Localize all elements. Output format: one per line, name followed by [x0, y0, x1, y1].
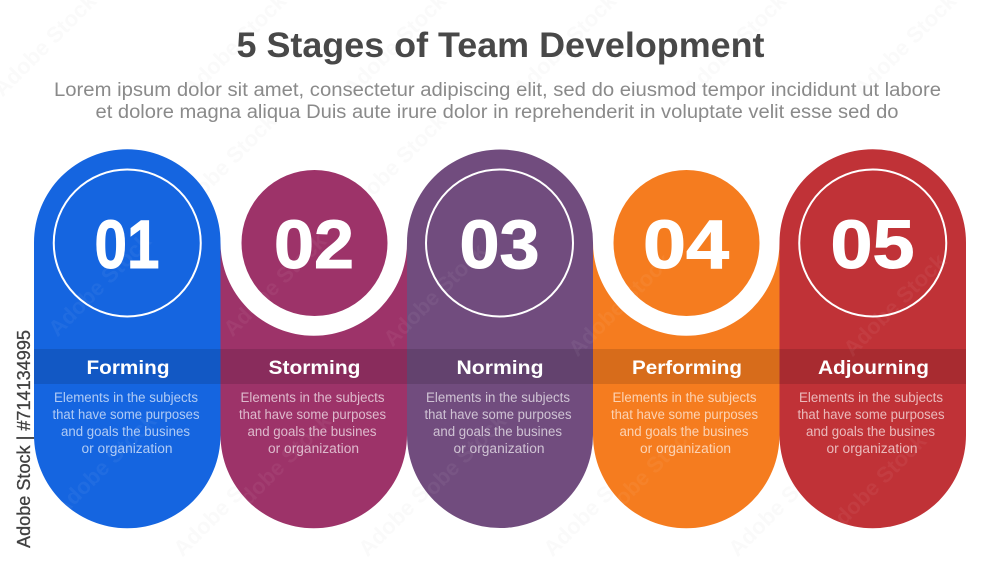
description 1: or organization: [82, 441, 172, 456]
label band 3: [407, 349, 593, 384]
heading Norming: Norming: [456, 357, 544, 379]
stock image side label: Adobe Stock | #714134995: [14, 330, 34, 548]
description 3: that have some purposes: [424, 407, 572, 422]
label band 1: [34, 349, 220, 384]
description 2: and goals the busines: [248, 424, 377, 439]
description 1: [52, 390, 200, 456]
panel: stage 3 Norming: [407, 149, 593, 528]
description 5: [798, 390, 945, 456]
description 3: [424, 390, 572, 456]
description 4: and goals the busines: [620, 424, 749, 439]
panel: stage 5 Adjourning: [780, 149, 966, 528]
label band 5: [780, 349, 966, 384]
title: 5 Stages of Team Development: [236, 26, 765, 65]
number 05: 05: [830, 206, 914, 283]
label band 2: [220, 349, 407, 384]
number ring 03: [426, 170, 573, 316]
description 2: that have some purposes: [239, 407, 386, 422]
number 03: 03: [460, 206, 540, 283]
heading Performing: Performing: [632, 357, 742, 379]
watermark over panels: Adobe Stock: [398, 408, 512, 521]
description 1: Elements in the subjects: [54, 390, 198, 405]
description 5: and goals the busines: [806, 424, 935, 439]
number 01: 01: [94, 206, 160, 283]
description 1: and goals the busines: [61, 424, 190, 439]
watermark on background: Adobe Stock: [168, 108, 282, 221]
description 3: or organization: [454, 441, 544, 456]
description 2: [239, 390, 386, 456]
subtitle text: [54, 80, 941, 123]
subtitle text: Lorem ipsum dolor sit amet, consectetur adipiscing elit, sed do eiusmod tempor incididunt ut labore: [54, 80, 941, 101]
number disc 02: [242, 170, 388, 316]
watermark on background: Adobe Stock: [723, 448, 837, 561]
panel: stage 1 Forming: [34, 149, 221, 528]
watermark over panels: Adobe Stock: [218, 228, 332, 341]
watermark over panels: Adobe Stock: [223, 408, 337, 521]
number 04: 04: [643, 206, 729, 283]
watermark on background: Adobe Stock: [538, 448, 652, 561]
number 02: 02: [274, 206, 354, 283]
description 4: Elements in the subjects: [612, 390, 757, 405]
watermark over panels: Adobe Stock: [43, 228, 157, 341]
watermark over panels: [43, 228, 952, 541]
subtitle text: et dolore magna aliqua Duis aute irure dolor in reprehenderit in voluptate velit esse sed do: [96, 102, 898, 123]
watermark over panels: Adobe Stock: [563, 248, 677, 361]
description 2: Elements in the subjects: [240, 390, 385, 405]
number disc 04: [614, 170, 760, 316]
heading Forming: Forming: [86, 357, 170, 379]
description 4: or organization: [640, 441, 731, 456]
watermark over panels: Adobe Stock: [838, 248, 952, 361]
number ring 01: [54, 170, 201, 316]
panel: stage 2 Storming: [220, 170, 407, 528]
watermark over panels: Adobe Stock: [818, 428, 932, 541]
watermark over panels: Adobe Stock: [588, 418, 702, 531]
heading Adjourning: Adjourning: [818, 357, 929, 379]
label band 4: [593, 349, 780, 384]
description 5: that have some purposes: [798, 407, 945, 422]
description 4: [611, 390, 758, 456]
description 2: or organization: [268, 441, 359, 456]
description 3: Elements in the subjects: [426, 390, 570, 405]
panel: stage 4 Performing: [593, 170, 780, 528]
description 4: that have some purposes: [611, 407, 758, 422]
watermark over panels: Adobe Stock: [378, 238, 492, 351]
description 1: that have some purposes: [52, 407, 200, 422]
number ring 05: [799, 170, 946, 316]
heading Storming: Storming: [268, 357, 360, 379]
watermark on background: Adobe Stock: [168, 448, 282, 561]
watermark on background: Adobe Stock: [338, 108, 452, 221]
description 5: Elements in the subjects: [799, 390, 943, 405]
watermark over panels: Adobe Stock: [48, 408, 162, 521]
description 3: and goals the busines: [433, 424, 562, 439]
description 5: or organization: [826, 441, 918, 456]
watermark on background: Adobe Stock: [353, 448, 467, 561]
